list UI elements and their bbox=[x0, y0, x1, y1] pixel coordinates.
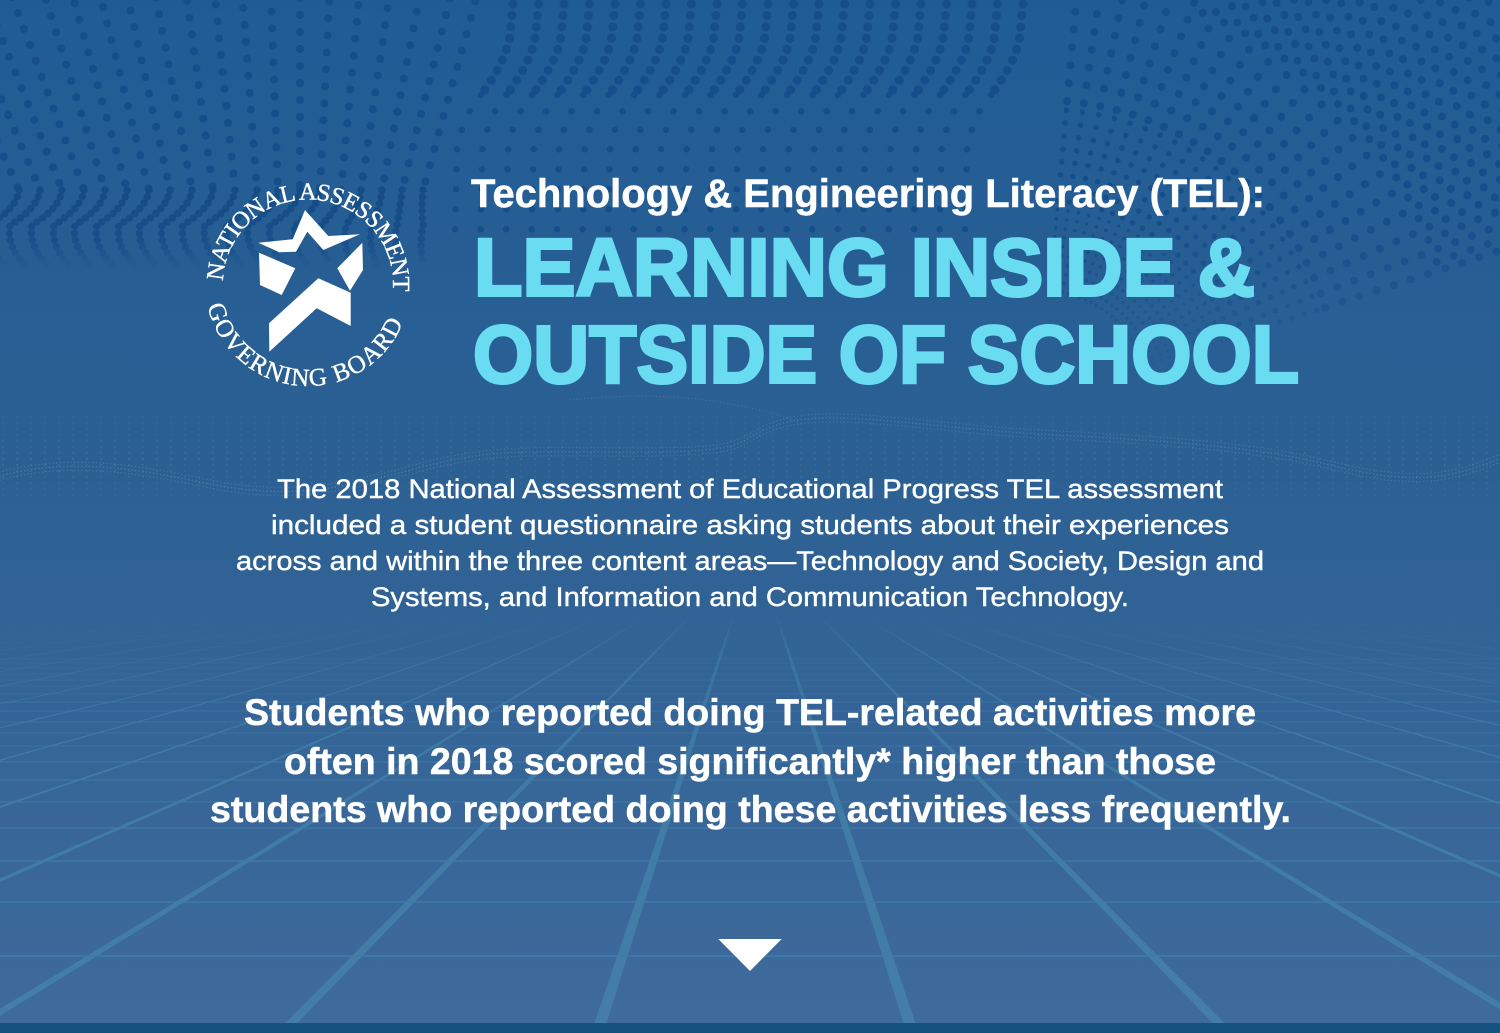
dot field: middle columns bbox=[455, 4, 1023, 235]
faint dotted wave band bbox=[0, 396, 1498, 496]
logo: National Assessment Governing Board bbox=[206, 183, 410, 386]
icon: star bbox=[258, 210, 363, 352]
key finding: Students who reported doing TEL-related activities more bbox=[244, 692, 1256, 733]
dot field: right radial fan bbox=[1053, 0, 1500, 315]
title: LEARNING INSIDE & bbox=[474, 222, 1255, 314]
intro paragraph: The 2018 National Assessment of Educational Progress TEL assessment bbox=[277, 474, 1224, 504]
intro paragraph bbox=[236, 474, 1264, 612]
key finding: often in 2018 scored significantly* higher than those bbox=[284, 741, 1216, 782]
arrow: down triangle bbox=[718, 939, 782, 971]
key finding: students who reported doing these activities less frequently. bbox=[210, 789, 1291, 830]
intro paragraph: included a student questionnaire asking students about their experiences bbox=[271, 510, 1229, 540]
subtitle: Technology & Engineering Literacy (TEL): bbox=[471, 172, 1265, 216]
logo text: bottom arc: GOVERNING BOARD bbox=[209, 304, 400, 386]
title bbox=[473, 222, 1299, 400]
bottom band bbox=[0, 1023, 1500, 1033]
title: OUTSIDE OF SCHOOL bbox=[473, 310, 1299, 400]
intro paragraph: across and within the three content areas—Technology and Society, Design and bbox=[236, 546, 1264, 576]
key finding bbox=[210, 692, 1291, 830]
intro paragraph: Systems, and Information and Communication Technology. bbox=[371, 582, 1129, 612]
dot field: left columns bbox=[0, 0, 480, 265]
logo text: top arc: NATIONAL ASSESSMENT bbox=[206, 183, 410, 292]
perspective grid bbox=[0, 550, 1500, 1023]
